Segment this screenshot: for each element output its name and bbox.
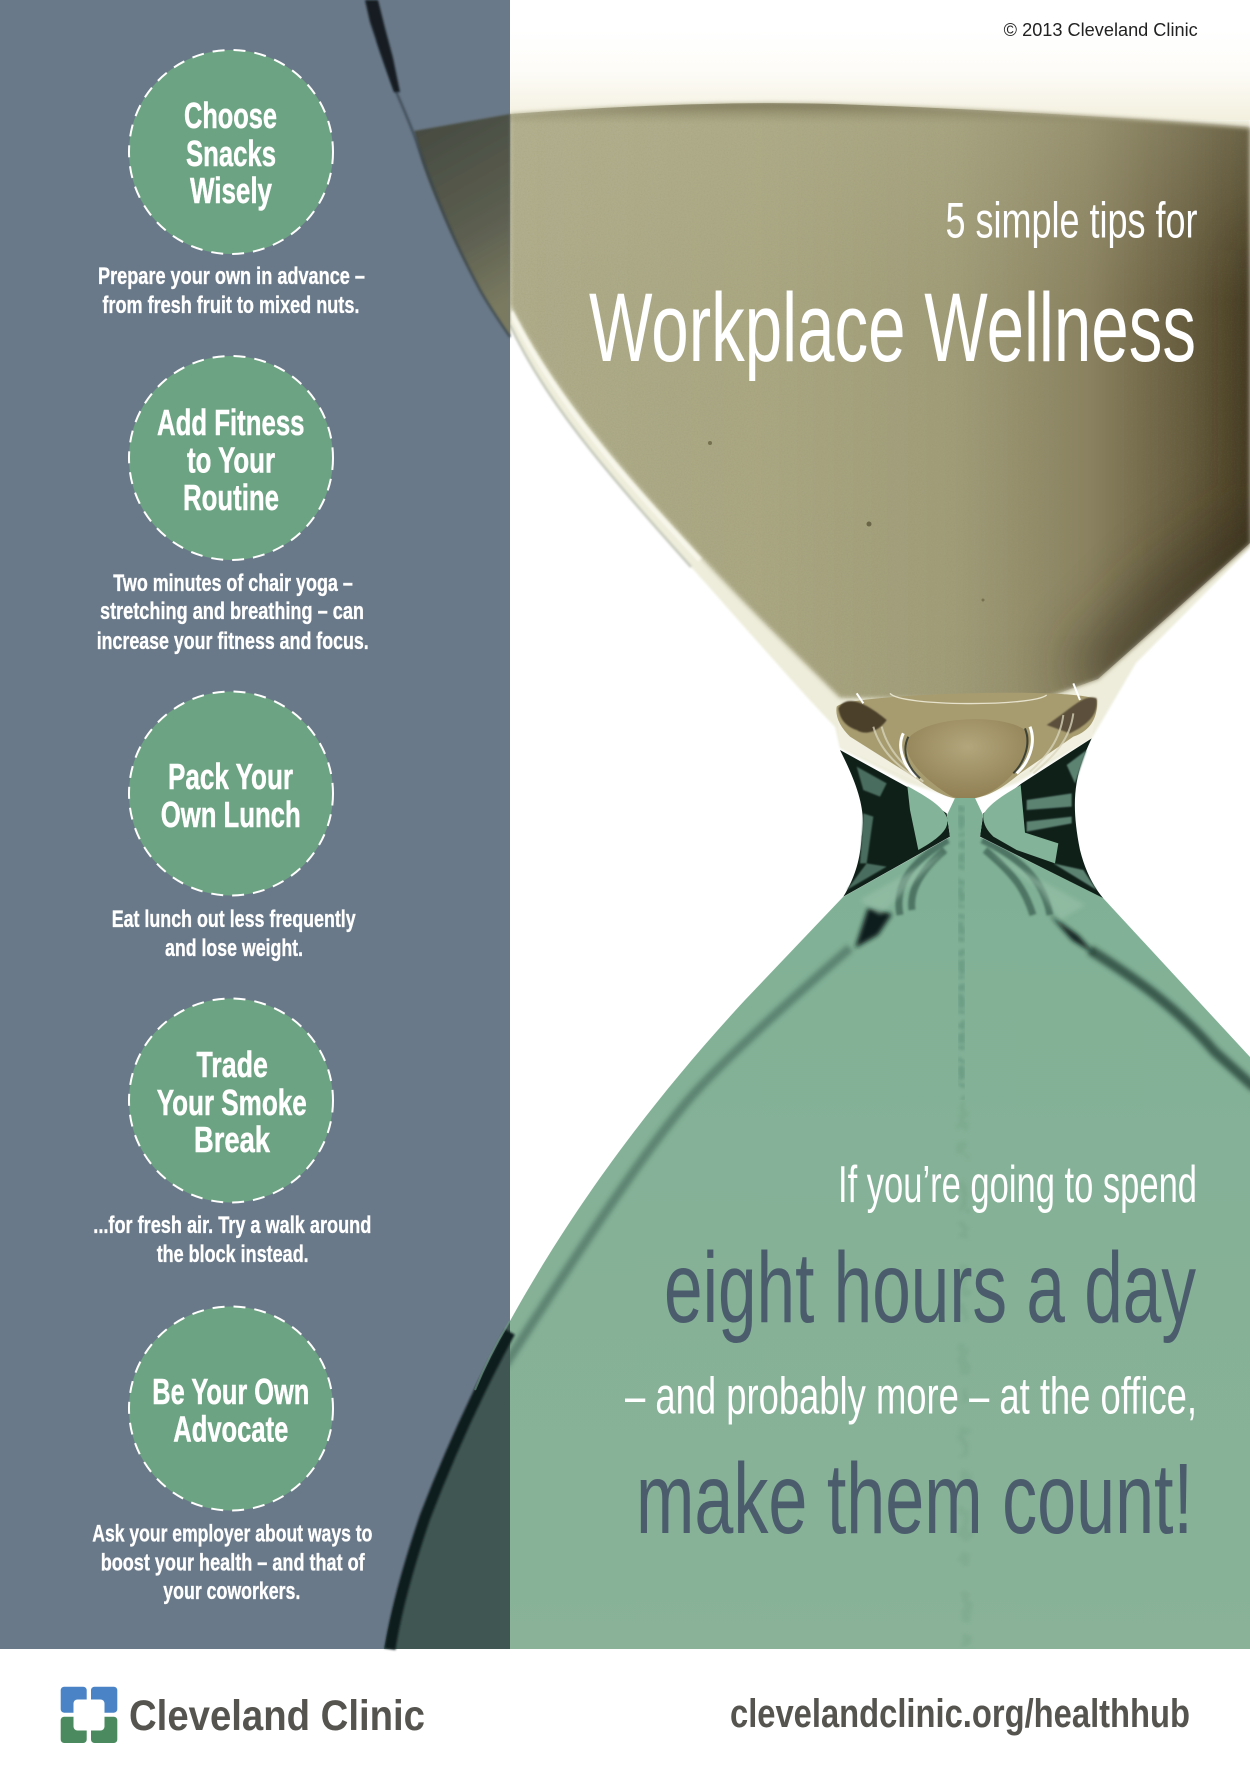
- inner sand drop: [906, 719, 1029, 799]
- right dark wedge: [980, 738, 1103, 898]
- tip 2: add fitness to your routine: Routine: [183, 477, 279, 518]
- glass top highlight: [510, 73, 1250, 120]
- glass base, lower left: [384, 1321, 510, 1649]
- tip 5: be your own advocate: Ask your employer about ways to: [92, 1521, 372, 1548]
- icon: Cleveland Clinic logo: [61, 1687, 117, 1743]
- tip 1: choose snacks wisely: Prepare your own in advance –: [98, 263, 365, 290]
- tip 5: be your own advocate: Advocate: [173, 1409, 288, 1450]
- brand name: Cleveland Clinic: [129, 1692, 425, 1740]
- tip 3: pack your own lunch: and lose weight.: [165, 935, 303, 962]
- tip 4: trade your smoke break: the block instead.: [157, 1241, 309, 1268]
- tip 3: pack your own lunch: Pack Your: [168, 756, 293, 797]
- tip 3: pack your own lunch: Own Lunch: [161, 794, 301, 835]
- tip 4: trade your smoke break: Trade: [196, 1044, 268, 1085]
- tip 4: trade your smoke break: Your Smoke: [157, 1082, 307, 1123]
- tip 3: pack your own lunch: [112, 692, 356, 962]
- neck of hourglass: [836, 683, 1103, 898]
- panel: hourglass photograph: [505, 30, 1250, 1649]
- tip 1: choose snacks wisely: [98, 50, 365, 319]
- cone of sand: [836, 693, 1097, 799]
- sand in upper bulb: [510, 100, 1250, 710]
- tip 4: trade your smoke break: [93, 998, 371, 1268]
- falling sand stream: [958, 806, 965, 1100]
- tip 1: choose snacks wisely: Choose: [184, 95, 277, 136]
- tip 4: trade your smoke break: ...for fresh air. Try a walk around: [93, 1212, 371, 1239]
- tip 2: add fitness to your routine: to Your: [187, 440, 275, 481]
- glass edge streak, upper left: [510, 325, 691, 567]
- panel: left column background: [0, 0, 510, 1649]
- tip 5: be your own advocate: [92, 1306, 372, 1605]
- tip 5: be your own advocate: boost your health – and that of: [101, 1550, 365, 1577]
- right light teardrop: [983, 785, 1058, 863]
- tip 2: add fitness to your routine: Add Fitness: [157, 402, 304, 443]
- left light teardrop: [907, 786, 947, 850]
- tip 5: be your own advocate: Be Your Own: [152, 1371, 309, 1412]
- tip 2: add fitness to your routine: Two minutes of chair yoga –: [113, 570, 353, 597]
- tip 2: add fitness to your routine: stretching and breathing – can: [100, 598, 364, 625]
- tip 2: add fitness to your routine: [97, 356, 369, 655]
- glass reflections in lower bulb: [505, 840, 1250, 1365]
- tip 5: be your own advocate: your coworkers.: [163, 1578, 300, 1605]
- glass band below sand: [953, 798, 978, 799]
- sand seen through the left panel: [414, 114, 510, 337]
- copyright: © 2013 Cleveland Clinic: [1004, 20, 1198, 40]
- left dark wedge: [840, 750, 950, 897]
- tip 1: choose snacks wisely: from fresh fruit to mixed nuts.: [102, 292, 359, 319]
- tip 3: pack your own lunch: Eat lunch out less frequently: [112, 906, 356, 933]
- tip 1: choose snacks wisely: Wisely: [190, 170, 272, 211]
- callout: make the hours count: [625, 1156, 1197, 1555]
- upper glass bulb: [510, 114, 1250, 798]
- tip 1: choose snacks wisely: Snacks: [186, 133, 276, 174]
- tip 2: add fitness to your routine: increase your fitness and focus.: [97, 628, 369, 655]
- tip 4: trade your smoke break: Break: [194, 1119, 271, 1160]
- glass edge, upper left: [378, 40, 510, 337]
- lower glass bulb filled with green: [510, 798, 1250, 1649]
